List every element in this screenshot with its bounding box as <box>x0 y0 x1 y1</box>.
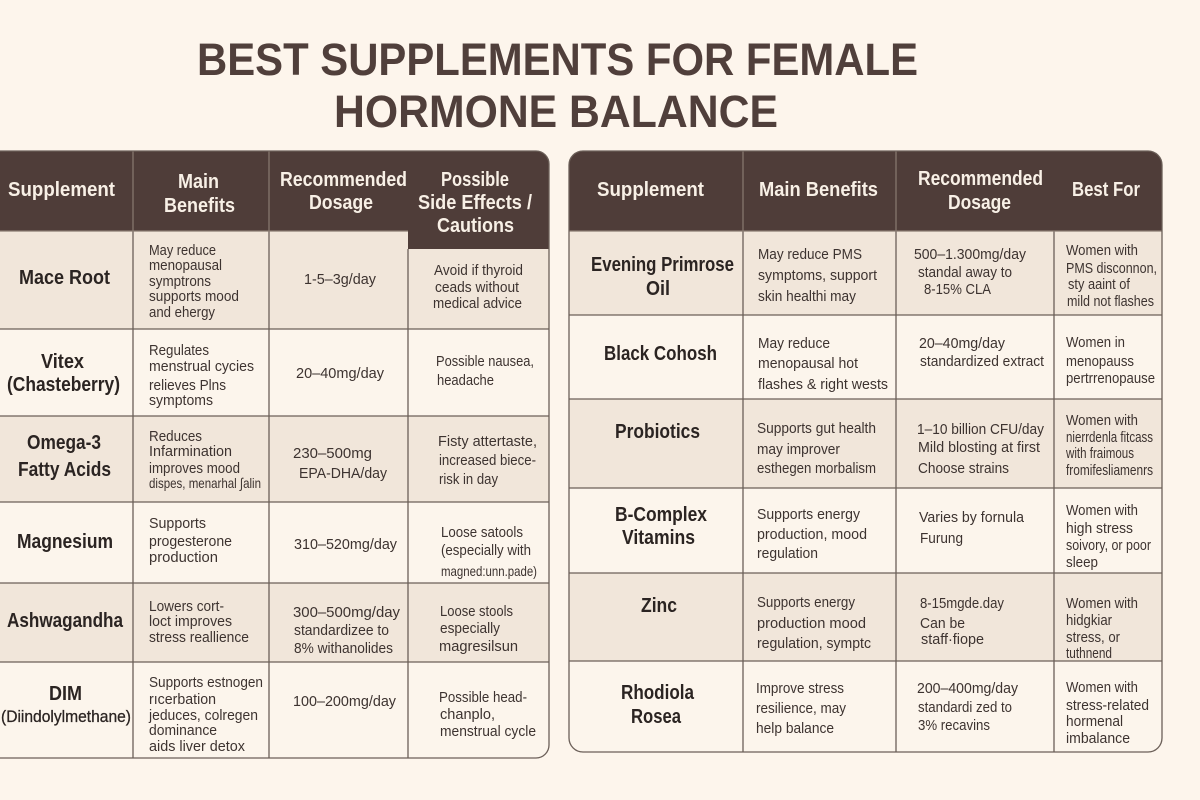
row: Magnesium: progesterone <box>149 533 232 550</box>
row: Magnesium: Loose satools <box>441 524 523 541</box>
row: Mace Root: ceads without <box>435 279 520 296</box>
row: Probiotics: with fraimous <box>1065 445 1134 462</box>
row: Omega-3: Omega-3 <box>27 432 101 454</box>
row: Probiotics: fromifesliamenrs <box>1066 462 1153 479</box>
row: Ashwagandha: loct improves <box>149 613 232 630</box>
row: Rhodiola Rosea: stress-related <box>1066 697 1149 714</box>
row: Evening Primrose Oil: 500–1.300mg/day <box>914 246 1026 263</box>
row: B-Complex Vitamins: B-Complex <box>615 504 707 526</box>
row: Ashwagandha: 8% withanolides <box>294 640 393 657</box>
row: Probiotics: Women with <box>1066 412 1138 429</box>
row: DIM: dominance <box>149 722 217 739</box>
row: Ashwagandha: 300–500mg/day <box>293 604 400 621</box>
right table header row: Main Benefits <box>759 179 878 201</box>
left table header row: Supplement <box>8 179 115 201</box>
row: Evening Primrose Oil: sty aaint of <box>1068 276 1131 293</box>
row: Zinc: Women with <box>1066 595 1138 612</box>
row: Zinc: staff·fiope <box>921 631 984 648</box>
left table header row: Benefits <box>164 195 235 217</box>
row: Rhodiola Rosea <box>621 679 1149 747</box>
row: B-Complex Vitamins <box>615 502 1151 571</box>
row: Ashwagandha: especially <box>440 620 500 637</box>
panel: right supplements table <box>569 151 1162 752</box>
left table header row: Side Effects / <box>418 192 532 214</box>
row: Evening Primrose Oil: skin healthi may <box>758 288 856 305</box>
row: Zinc <box>641 594 1138 662</box>
row: B-Complex Vitamins: sleep <box>1066 554 1098 571</box>
row: Ashwagandha: Lowers cort- <box>149 598 224 615</box>
row: Mace Root: symptrons <box>149 273 211 290</box>
row: Vitex: relieves Plns <box>149 377 226 394</box>
row: DIM: (Diindolylmethane) <box>1 707 131 726</box>
row: Rhodiola Rosea: standardi zed to <box>918 699 1012 716</box>
row: Mace Root: medical advice <box>433 295 522 312</box>
row: Vitex: menstrual cycies <box>149 358 254 375</box>
row: Omega-3 <box>18 428 537 491</box>
row: Mace Root: 1-5–3g/day <box>304 271 376 288</box>
row: Mace Root: May reduce <box>149 242 216 259</box>
right table header row: Best For <box>1072 179 1140 201</box>
right table header row: Supplement <box>597 179 704 201</box>
row: Black Cohosh: pertrrenopause <box>1066 370 1155 387</box>
row: Omega-3: 230–500mg <box>293 445 372 462</box>
row: Black Cohosh: 20–40mg/day <box>919 335 1005 352</box>
row: B-Complex Vitamins: Supports energy <box>757 506 860 523</box>
row: Evening Primrose Oil: Women with <box>1066 242 1138 259</box>
title: HORMONE BALANCE <box>334 86 778 137</box>
row: Magnesium <box>17 515 537 579</box>
row: Vitex: Vitex <box>41 351 84 373</box>
row: Zinc: Supports energy <box>757 594 855 611</box>
row: Zinc: Can be <box>920 615 965 632</box>
row: Black Cohosh <box>604 334 1155 393</box>
row: DIM: Supports estnogen <box>149 674 263 691</box>
row: Magnesium: magned:unn.pade) <box>441 563 537 579</box>
row: Evening Primrose Oil: 8-15% CLA <box>924 281 991 298</box>
row: Probiotics: 1–10 billion CFU/day <box>917 421 1044 438</box>
row: DIM: Possible head- <box>439 689 527 706</box>
row: Zinc: tuthnend <box>1066 645 1112 662</box>
row: DIM: DIM <box>49 683 82 705</box>
row: Rhodiola Rosea: 3% recavins <box>918 717 990 734</box>
row: Zinc: stress, or <box>1066 629 1120 646</box>
right table header row <box>597 168 1140 214</box>
row: Rhodiola Rosea: imbalance <box>1066 730 1130 747</box>
left table header row: Cautions <box>437 215 514 237</box>
row: Omega-3: Reduces <box>149 428 202 445</box>
row: Probiotics: Supports gut health <box>757 420 876 437</box>
row: Evening Primrose Oil: PMS disconnon, <box>1066 260 1157 277</box>
row: Vitex <box>7 342 534 409</box>
row: Rhodiola Rosea: hormenal <box>1066 713 1123 730</box>
row: Evening Primrose Oil: May reduce PMS <box>758 246 862 263</box>
row: Vitex: (Chasteberry) <box>7 374 120 396</box>
row: Mace Root: menopausal <box>149 257 222 274</box>
row: Black Cohosh: May reduce <box>758 335 830 352</box>
row: DIM: menstrual cycle <box>440 723 536 740</box>
row: DIM: aids liver detox <box>149 738 245 755</box>
row: Vitex: 20–40mg/day <box>296 365 384 382</box>
row: Omega-3: Infarmination <box>149 443 232 460</box>
right table header row: Dosage <box>948 192 1011 214</box>
left table header row: Possible <box>441 169 509 191</box>
row: Black Cohosh: Black Cohosh <box>604 343 717 365</box>
row: Black Cohosh: standardized extract <box>920 353 1045 370</box>
row: Ashwagandha: standardizee to <box>294 622 389 639</box>
row: DIM: rıcerbation <box>149 691 216 708</box>
row: Magnesium: Magnesium <box>17 531 113 553</box>
row: Zinc: regulation, symptc <box>757 635 871 652</box>
row: Omega-3: increased biece- <box>439 452 536 469</box>
row: Evening Primrose Oil: standal away to <box>918 264 1012 281</box>
row: Omega-3: EPA-DHA/day <box>299 465 387 482</box>
row: Mace Root: and ehergy <box>149 304 215 321</box>
row: Magnesium: production <box>149 549 218 566</box>
row: Rhodiola Rosea: resilience, may <box>756 700 846 717</box>
row: B-Complex Vitamins: Vitamins <box>622 527 695 549</box>
row: Probiotics <box>615 412 1153 479</box>
row: Ashwagandha: stress reallience <box>149 629 249 646</box>
left table header row: Main <box>178 171 219 193</box>
row: Ashwagandha: magresilsun <box>439 638 518 655</box>
row: Evening Primrose Oil: mild not flashes <box>1067 293 1154 310</box>
row: Black Cohosh: flashes & right wests <box>758 376 888 393</box>
row: Probiotics: nierrdenla fitcass <box>1066 429 1153 446</box>
row: Probiotics: esthegen morbalism <box>757 460 876 477</box>
row: Magnesium: Supports <box>149 515 206 532</box>
row: Ashwagandha: Loose stools <box>440 603 513 620</box>
row: Rhodiola Rosea: Improve stress <box>756 680 844 697</box>
row: B-Complex Vitamins: production, mood <box>757 526 867 543</box>
row: Evening Primrose Oil: symptoms, support <box>758 267 878 284</box>
row: DIM <box>1 674 536 755</box>
row: DIM: 100–200mg/day <box>293 693 396 710</box>
row: B-Complex Vitamins: Furung <box>920 530 963 547</box>
row: Omega-3: improves mood <box>149 460 240 477</box>
right table header row: Recommended <box>918 168 1043 190</box>
row: B-Complex Vitamins: soivory, or poor <box>1066 537 1151 554</box>
row: B-Complex Vitamins: Varies by fornula <box>919 509 1025 526</box>
row: Omega-3: Fisty attertaste, <box>438 433 537 450</box>
row: Rhodiola Rosea: Women with <box>1066 679 1138 696</box>
row: Vitex: Regulates <box>149 342 209 359</box>
row: B-Complex Vitamins: Women with <box>1066 502 1138 519</box>
row: Rhodiola Rosea: help balance <box>756 720 834 737</box>
panel: left supplements table <box>0 151 549 758</box>
row: Vitex: Possible nausea, <box>436 353 534 370</box>
left table header row <box>8 169 532 237</box>
row: Magnesium: (especially with <box>441 542 531 559</box>
left table header row: Recommended <box>280 169 407 191</box>
row: DIM: jeduces, colregen <box>148 707 258 724</box>
row: Mace Root <box>19 242 523 321</box>
row: Magnesium: 310–520mg/day <box>294 536 397 553</box>
row: Zinc: production mood <box>757 615 866 632</box>
row: B-Complex Vitamins: high stress <box>1066 520 1133 537</box>
row: Omega-3: Fatty Acids <box>18 459 111 481</box>
row: Zinc: 8-15mgde.day <box>920 595 1004 612</box>
row: Mace Root: Mace Root <box>19 267 110 289</box>
row: Omega-3: dispes, menarhal ∫alin <box>149 475 261 491</box>
row: Evening Primrose Oil: Oil <box>646 278 670 300</box>
row: Ashwagandha <box>7 598 518 657</box>
row: Zinc: hidgkiar <box>1066 612 1112 629</box>
row: Zinc: Zinc <box>641 595 677 617</box>
row: Black Cohosh: menopauss <box>1066 353 1134 370</box>
row: Evening Primrose Oil: Evening Primrose <box>591 254 734 276</box>
row: Rhodiola Rosea: Rhodiola <box>621 682 695 704</box>
row: Probiotics: may improver <box>757 441 840 458</box>
row: Black Cohosh: menopausal hot <box>758 355 859 372</box>
row: Vitex: symptoms <box>149 392 213 409</box>
row: Ashwagandha: Ashwagandha <box>7 610 124 632</box>
left table header row: Dosage <box>309 192 373 214</box>
row: Probiotics: Choose strains <box>918 460 1009 477</box>
row: DIM: chanplo, <box>440 706 495 723</box>
row: Vitex: headache <box>437 372 494 389</box>
title <box>197 34 918 137</box>
row: Mace Root: Avoid if thyroid <box>434 262 523 279</box>
title: BEST SUPPLEMENTS FOR FEMALE <box>197 34 918 85</box>
row: Omega-3: risk in day <box>439 471 498 488</box>
row: Probiotics: Probiotics <box>615 421 700 443</box>
row: Rhodiola Rosea: 200–400mg/day <box>917 680 1018 697</box>
row: Evening Primrose Oil <box>591 242 1157 310</box>
row: Black Cohosh: Women in <box>1066 334 1125 351</box>
row: Rhodiola Rosea: Rosea <box>631 706 682 728</box>
row: B-Complex Vitamins: regulation <box>757 545 818 562</box>
row: Probiotics: Mild blosting at first <box>918 439 1041 456</box>
row: Mace Root: supports mood <box>149 288 239 305</box>
